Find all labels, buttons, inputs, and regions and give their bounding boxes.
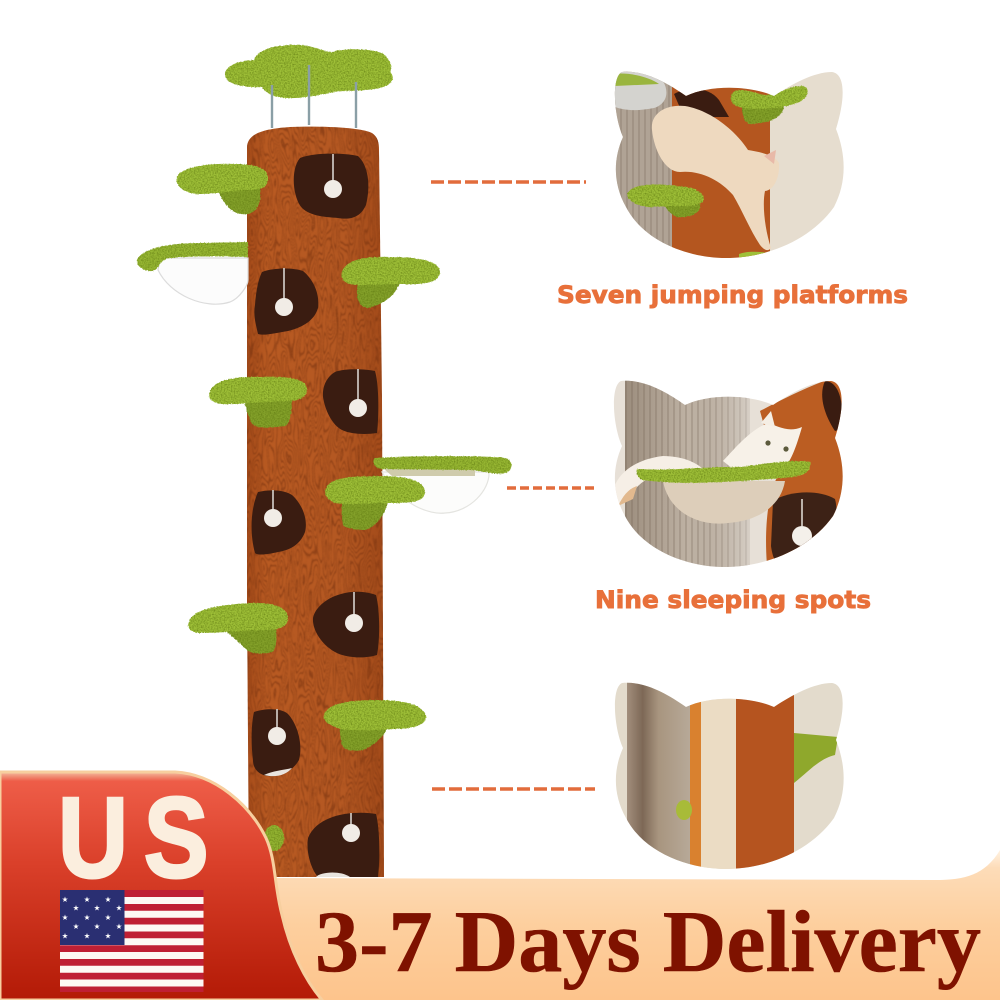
cat <box>652 106 779 250</box>
clear bowl <box>663 481 785 524</box>
top cloud platform <box>225 45 393 128</box>
photo: sisal scratching post <box>614 682 844 869</box>
dashed connector 2 <box>507 486 594 490</box>
platform 7 <box>324 700 426 751</box>
photo: cat on jumping platform <box>614 72 844 258</box>
right bowl platform <box>373 456 511 513</box>
cat tree product <box>137 45 511 880</box>
platform 6 <box>188 603 288 654</box>
hole 3 with toy <box>323 369 378 434</box>
hole 5 with toy <box>313 592 379 657</box>
cat <box>616 456 702 503</box>
hole 4 with toy <box>252 490 306 555</box>
hole 1 with toy <box>294 154 368 219</box>
platform 5 <box>325 476 425 530</box>
hole 2 with toy <box>254 268 318 335</box>
upper green platform <box>731 86 808 124</box>
dashed connector 3 <box>432 787 595 791</box>
lower green platform <box>627 185 704 217</box>
US flag <box>60 890 204 992</box>
US heading: US <box>58 775 208 902</box>
left bowl platform <box>137 242 248 304</box>
US red badge <box>0 772 322 1000</box>
hole 7 with toy <box>307 813 379 877</box>
delivery headline: 3-7 Days Delivery <box>315 894 981 991</box>
dashed connector 1 <box>431 180 586 184</box>
small green stub <box>264 825 284 851</box>
label: seven jumping platforms: Seven jumping platforms <box>557 281 908 309</box>
platform 1 <box>177 164 268 214</box>
platform 3 <box>209 377 307 428</box>
label: nine sleeping spots: Nine sleeping spots <box>595 586 871 614</box>
green bed <box>637 461 810 483</box>
delivery banner background <box>270 850 1000 1000</box>
photo: cat in sleeping bowl <box>614 380 843 567</box>
platform 2 <box>342 257 440 308</box>
hole 6 with toy <box>252 709 300 776</box>
trunk <box>240 120 390 880</box>
